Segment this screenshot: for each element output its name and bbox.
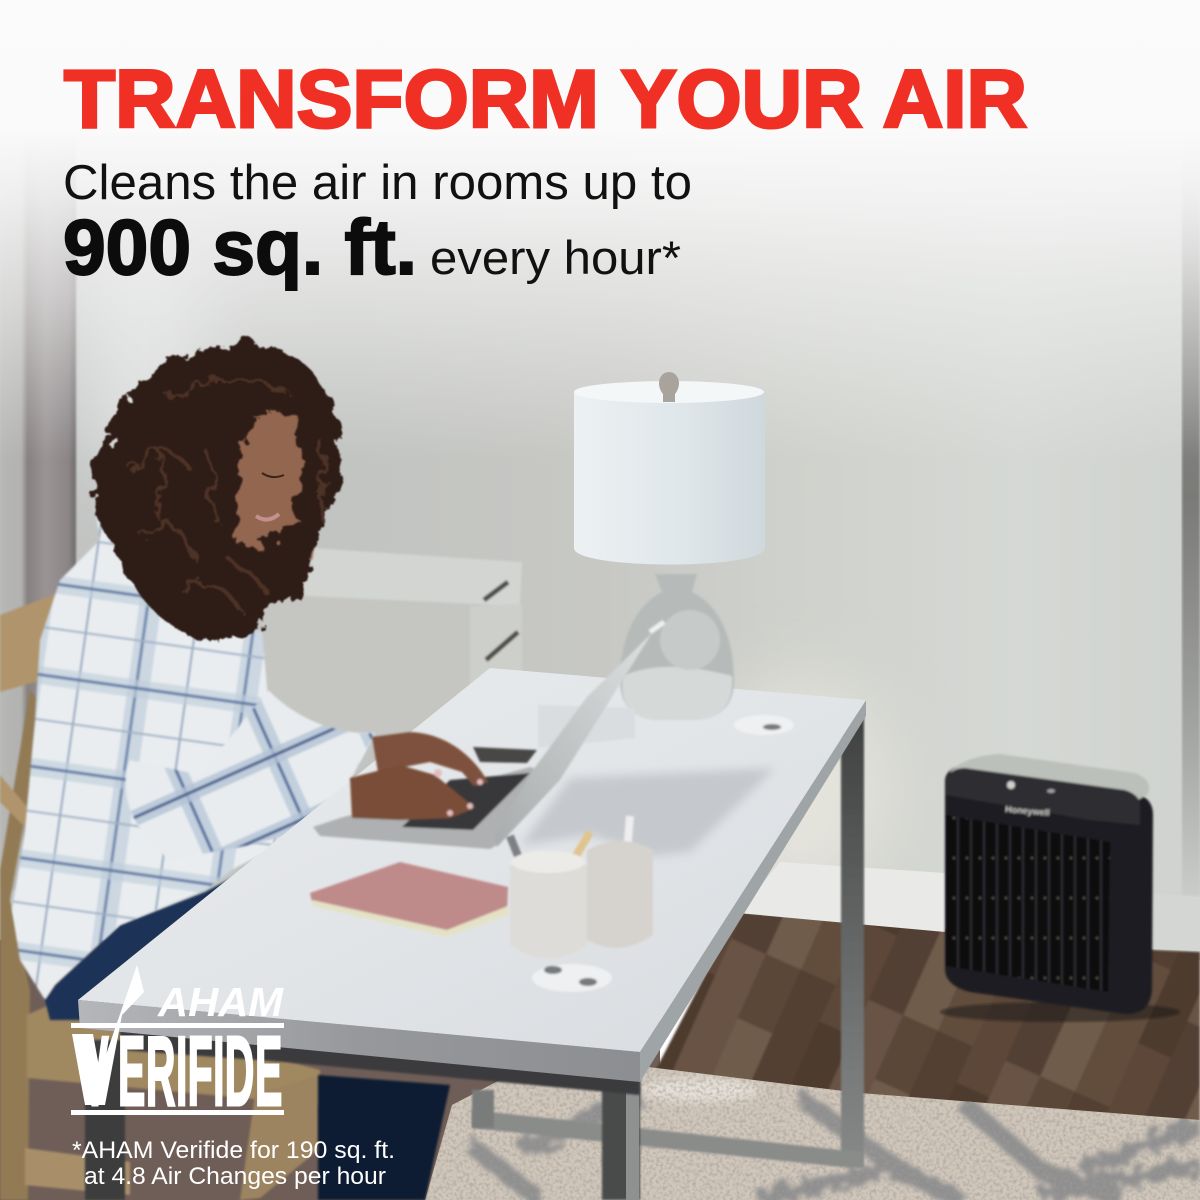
grey pen	[510, 836, 522, 866]
subheading line two	[63, 203, 681, 291]
window wall panel	[90, 240, 200, 480]
table far leg	[841, 708, 864, 1168]
logo AHAM: AHAM	[157, 979, 284, 1025]
grommet front	[532, 964, 612, 992]
lamp glass base	[620, 574, 734, 720]
lamp	[574, 372, 765, 720]
eye and lips	[256, 473, 284, 520]
table rail stub	[472, 1090, 494, 1128]
chair	[0, 594, 320, 1200]
table lower rail	[472, 1110, 862, 1168]
logo top rule	[71, 1023, 284, 1028]
chair front leg	[240, 1075, 318, 1200]
grommet back	[734, 715, 794, 735]
chair upright	[0, 690, 38, 1200]
laptop keyboard	[402, 773, 530, 830]
pencil	[570, 832, 590, 866]
table left leg	[85, 1040, 125, 1200]
logo VERIFIDE: VERIFIDE	[81, 1016, 282, 1126]
table near leg	[602, 1075, 640, 1200]
chair seat	[27, 1000, 320, 1105]
notebook	[310, 862, 508, 932]
hair	[91, 343, 340, 642]
drawer cabinet	[262, 548, 522, 745]
nails	[434, 769, 483, 816]
table shadow	[520, 768, 775, 856]
shirt sleeve	[126, 690, 375, 860]
purifier shadow	[940, 1002, 1180, 1022]
chair top rail	[0, 594, 55, 692]
rug grey pattern	[470, 1095, 1200, 1200]
table front edge	[78, 1000, 640, 1082]
shirt torso	[12, 508, 375, 1000]
lamp shade	[574, 382, 765, 564]
chair rung	[25, 1148, 130, 1195]
headline: TRANSFORM YOUR AIR	[64, 54, 1027, 145]
stapler	[538, 705, 635, 748]
every hour text: every hour*	[430, 231, 681, 284]
lower left floor	[0, 940, 660, 1200]
lamp shade top	[574, 381, 764, 403]
purifier grille	[946, 815, 1110, 992]
notebook pages	[312, 900, 508, 937]
desk items	[310, 633, 794, 992]
chair diagonal strut	[0, 775, 34, 832]
laptop screen	[495, 633, 652, 847]
top white fade	[0, 0, 1200, 460]
front pencil cup	[510, 856, 587, 958]
purifier control panel	[946, 768, 1140, 825]
lower hand	[350, 765, 475, 820]
rug shag texture	[426, 1068, 1200, 1200]
back pencil cup	[587, 841, 653, 948]
logo bottom rule	[71, 1110, 284, 1115]
rug lit patch	[640, 1078, 760, 1102]
wood floor	[640, 912, 1200, 1140]
rug	[425, 1067, 1200, 1200]
wall corner at right	[1182, 100, 1200, 895]
lamp finial	[659, 372, 679, 402]
person	[12, 343, 450, 1200]
table under apron	[120, 1030, 640, 1095]
baseboard	[738, 862, 945, 932]
subheading line one: Cleans the air in rooms up to	[63, 156, 692, 210]
purifier buttons	[1007, 781, 1055, 793]
footnote	[72, 1137, 395, 1190]
jeans lower leg	[318, 1075, 450, 1200]
table	[78, 668, 866, 1200]
table surface	[78, 668, 866, 1052]
table side edge	[640, 700, 866, 1082]
laptop base	[313, 767, 540, 849]
curtain	[0, 100, 76, 890]
footnote line one: *AHAM Verifide for 190 sq. ft.	[72, 1137, 395, 1164]
purifier body	[945, 765, 1153, 1014]
purifier glass top	[950, 754, 1149, 800]
white pen	[627, 816, 630, 852]
soft light on wall	[710, 680, 890, 900]
upper hand	[372, 732, 488, 786]
purifier	[940, 754, 1180, 1022]
AHAM Verifide logo	[71, 965, 284, 1126]
wall	[0, 0, 1200, 960]
face	[225, 395, 325, 565]
jeans thigh	[45, 868, 250, 1020]
logo checkmark	[72, 965, 144, 1105]
purifier logo: Honeywell	[1005, 804, 1050, 818]
phone	[473, 747, 537, 763]
big figure: 900 sq. ft.	[63, 203, 417, 291]
footnote line two: at 4.8 Air Changes per hour	[84, 1163, 386, 1190]
